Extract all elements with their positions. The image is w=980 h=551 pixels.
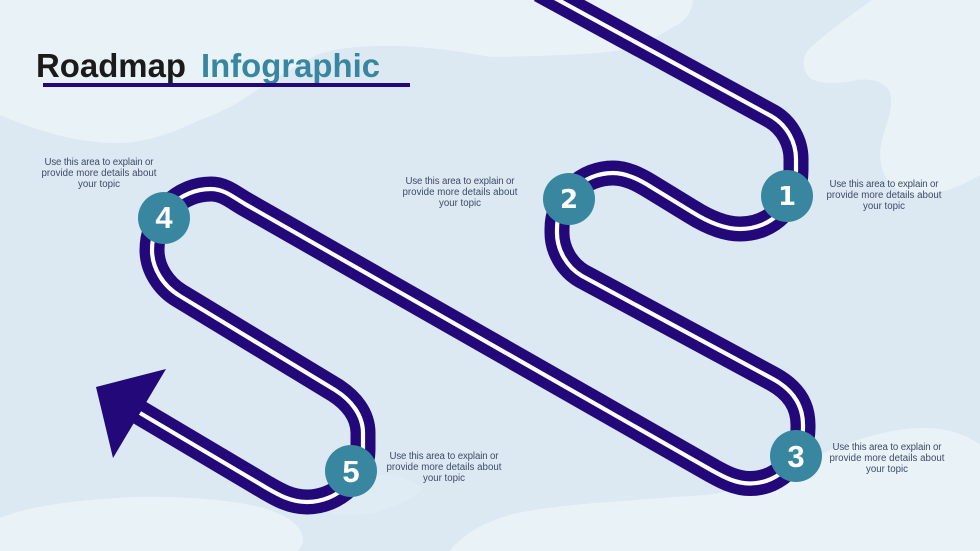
marker 3: 3 xyxy=(787,439,805,474)
text block 1 xyxy=(826,179,942,212)
text block 4 xyxy=(42,157,157,190)
marker 2: 2 xyxy=(560,185,578,215)
marker 3 xyxy=(770,430,822,482)
text block 3: Use this area to explain or xyxy=(832,442,942,453)
marker 4: 4 xyxy=(155,200,173,235)
text block 1: Use this area to explain or xyxy=(830,179,939,190)
text block 2: Use this area to explain or xyxy=(406,176,515,187)
road centre line xyxy=(140,0,803,502)
text block 5: provide more details about xyxy=(386,462,502,473)
title xyxy=(36,47,380,84)
text block 5: Use this area to explain or xyxy=(390,451,499,462)
marker 5 xyxy=(325,445,377,497)
marker 1: 1 xyxy=(778,182,796,212)
text block 1: provide more details about xyxy=(826,190,942,201)
road surface xyxy=(137,0,803,502)
title: Roadmap xyxy=(36,47,186,84)
text block 2: your topic xyxy=(439,198,481,209)
marker 4 xyxy=(138,192,190,244)
arrowhead xyxy=(96,369,166,458)
text block 2: provide more details about xyxy=(402,187,518,198)
title: Infographic xyxy=(201,47,380,84)
marker 5: 5 xyxy=(342,454,360,489)
text block 5 xyxy=(386,451,502,484)
text block 4: Use this area to explain or xyxy=(44,157,154,168)
text block 4: provide more details about xyxy=(42,168,157,179)
text block 3: your topic xyxy=(866,464,908,475)
title underline xyxy=(43,83,410,87)
marker 2 xyxy=(543,173,595,225)
text block 3 xyxy=(830,442,945,475)
text block 3: provide more details about xyxy=(830,453,945,464)
text block 5: your topic xyxy=(423,473,465,484)
text block 1: your topic xyxy=(863,201,905,212)
text block 2 xyxy=(402,176,518,209)
marker 1 xyxy=(761,170,813,222)
text block 4: your topic xyxy=(78,179,120,190)
